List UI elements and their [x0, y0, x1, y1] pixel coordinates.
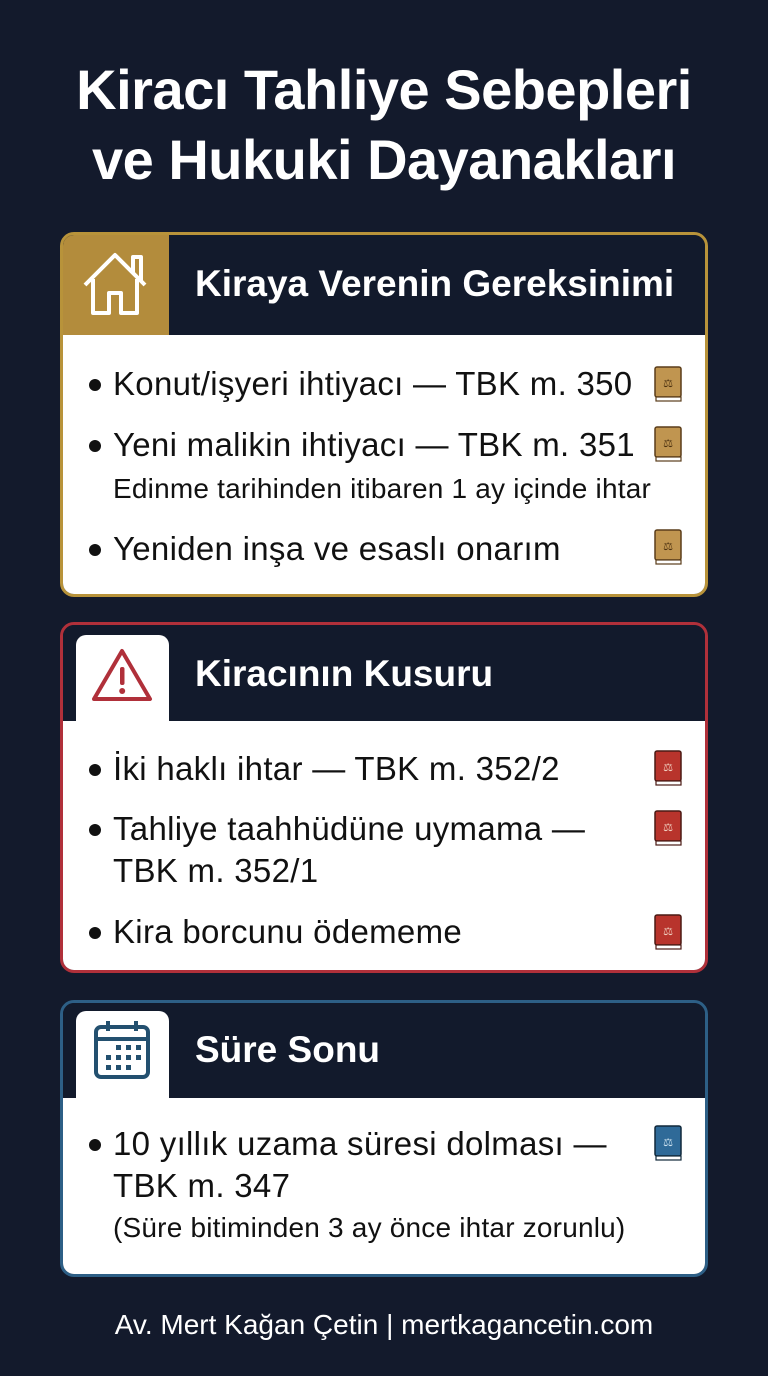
body: [63, 721, 705, 970]
icon: book blue: ⚖: [663, 1137, 673, 1149]
header bar: [63, 1003, 705, 1098]
item 1: [85, 1123, 607, 1207]
title: [76, 58, 692, 191]
icon: books red: ⚖: [663, 926, 673, 938]
heading: Kiraya Verenin Gereksinimi: [195, 263, 674, 304]
heading: Süre Sonu: [195, 1029, 380, 1070]
item 1: Konut/işyeri ihtiyacı — TBK m. 350: [113, 365, 632, 402]
header bar: [63, 625, 705, 721]
panel: kiracının kusuru: [60, 622, 708, 973]
item 3: Yeniden inşa ve esaslı onarım: [113, 530, 561, 567]
panel: süre sonu: [60, 1000, 708, 1277]
icon: books gold: ⚖: [663, 438, 673, 450]
header bar: [63, 235, 705, 335]
title: ve Hukuki Dayanakları: [92, 128, 676, 191]
icon: book blue: [654, 1125, 682, 1161]
icon: books red: [654, 750, 682, 950]
sub note: (Süre bitiminden 3 ay önce ihtar zorunlu): [113, 1212, 625, 1243]
heading: Kiracının Kusuru: [195, 653, 493, 694]
icon: house: [63, 235, 169, 335]
icon: books gold: ⚖: [663, 378, 673, 390]
item 2: Tahliye taahhüdüne uymama —: [113, 810, 585, 847]
title: Kiracı Tahliye Sebepleri: [76, 58, 692, 121]
icon: books gold: ⚖: [663, 541, 673, 553]
body: [63, 1098, 705, 1274]
icon: books red: ⚖: [663, 822, 673, 834]
icon: books gold: [654, 366, 682, 565]
item 1: 10 yıllık uzama süresi dolması —: [113, 1125, 607, 1162]
icon: calendar: [76, 1011, 169, 1099]
body: [63, 335, 705, 594]
item 2: [85, 808, 585, 892]
panel: kiraya verenin gereksinimi: [60, 232, 708, 597]
sub note: Edinme tarihinden itibaren 1 ay içinde ihtar: [113, 473, 651, 504]
item 1: TBK m. 347: [113, 1167, 290, 1204]
item 1: İki haklı ihtar — TBK m. 352/2: [113, 750, 560, 787]
footer: Av. Mert Kağan Çetin | mertkagancetin.com: [115, 1309, 653, 1340]
icon: warning: [76, 635, 169, 725]
item 3: Kira borcunu ödememe: [113, 913, 462, 950]
item 2: TBK m. 352/1: [113, 852, 318, 889]
icon: books red: ⚖: [663, 762, 673, 774]
item 2: Yeni malikin ihtiyacı — TBK m. 351: [113, 426, 635, 463]
